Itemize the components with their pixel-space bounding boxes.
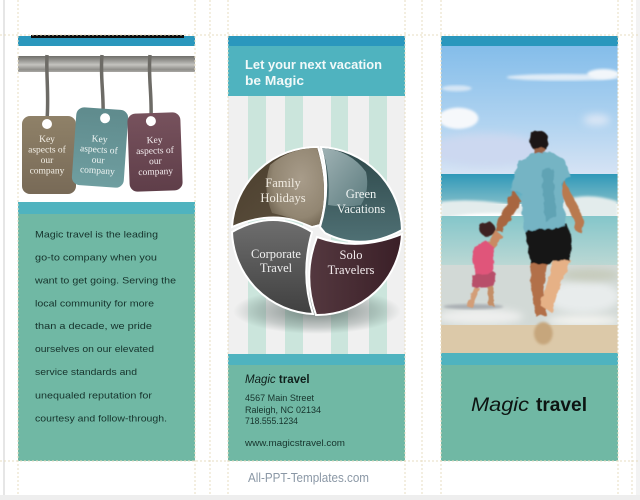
body text: unequaled reputation for <box>35 390 152 401</box>
segment: Green Vacations <box>320 147 402 242</box>
top blue band <box>228 36 405 46</box>
segment: Solo Travelers: Solo <box>340 248 362 262</box>
panel: middle column <box>228 36 405 461</box>
green title block <box>441 365 618 461</box>
green background <box>18 214 195 461</box>
header text <box>245 57 382 88</box>
teal band <box>228 354 405 365</box>
hanging rod <box>18 56 195 72</box>
top blue band <box>441 36 618 46</box>
panel: right column <box>430 36 620 461</box>
contact details: 718.555.1234 <box>245 416 298 426</box>
brochure title <box>471 395 587 416</box>
header text: be Magic <box>245 73 304 88</box>
brochure title: Magic <box>471 395 530 416</box>
segment: Corporate Travel: Corporate <box>251 247 301 261</box>
contact details: www.magicstravel.com <box>244 438 345 448</box>
sphere shadow <box>233 288 401 334</box>
header block <box>228 46 405 96</box>
body text: local community for more <box>35 299 154 310</box>
black strip <box>31 35 184 38</box>
tag: brown: Key <box>39 135 55 145</box>
tag: teal <box>71 55 129 188</box>
segment: Corporate Travel: Travel <box>260 261 293 275</box>
body text: courtesy and follow-through. <box>35 414 167 425</box>
body text: Magic travel is the leading <box>35 229 158 240</box>
tag: plum: our <box>149 157 163 167</box>
sea and surf <box>437 174 620 353</box>
price tags graphic <box>22 55 183 194</box>
man and child figures <box>467 131 585 317</box>
contact details <box>244 393 345 448</box>
header text: Let your next vacation <box>245 57 382 72</box>
sky and clouds <box>430 46 620 174</box>
segment: Green Vacations: Vacations <box>337 202 385 216</box>
teal band <box>441 353 618 365</box>
panel: left column <box>18 35 195 461</box>
tag: brown: our <box>41 156 54 166</box>
segment: Family Holidays <box>232 147 325 227</box>
body text: ourselves on our elevated <box>35 344 154 355</box>
teal band <box>18 202 195 214</box>
segment: Solo Travelers <box>309 234 402 315</box>
body text: go-to company when you <box>35 253 157 264</box>
tag: brown <box>22 55 76 194</box>
body text: want to get going. Serving the <box>34 275 176 286</box>
brochure title: travel <box>536 395 587 416</box>
body text: than a decade, we pride <box>35 321 152 332</box>
child <box>467 222 503 307</box>
tag: teal: company <box>80 165 115 178</box>
segment: Family Holidays: Holidays <box>260 191 306 205</box>
tag: plum: Key <box>147 136 163 146</box>
man <box>496 131 585 317</box>
body text <box>34 229 176 425</box>
tag: teal: our <box>91 155 106 166</box>
beach photo illustration <box>430 46 620 353</box>
segment: Corporate Travel <box>232 220 313 314</box>
top blue band <box>18 36 195 46</box>
tag: plum <box>127 55 183 192</box>
segment: Solo Travelers: Travelers <box>328 263 375 277</box>
contact details: Raleigh, NC 02134 <box>245 405 321 415</box>
four-part circle diagram <box>232 147 402 315</box>
tag: teal: aspects of <box>80 143 119 157</box>
segment: Green Vacations: Green <box>346 187 377 201</box>
tag: teal: Key <box>91 134 108 146</box>
brand name: Magic travel <box>245 374 310 386</box>
segment: Family Holidays: Family <box>265 176 301 190</box>
tag: plum: company <box>138 167 174 178</box>
tag: plum: aspects of <box>136 145 175 157</box>
striped background <box>228 96 405 354</box>
tag: brown: company <box>30 166 65 176</box>
body text: service standards and <box>35 367 137 378</box>
green contact block <box>228 365 405 461</box>
contact details: 4567 Main Street <box>245 393 314 403</box>
tag: brown: aspects of <box>28 144 67 156</box>
footer credit: All-PPT-Templates.com <box>248 471 369 485</box>
